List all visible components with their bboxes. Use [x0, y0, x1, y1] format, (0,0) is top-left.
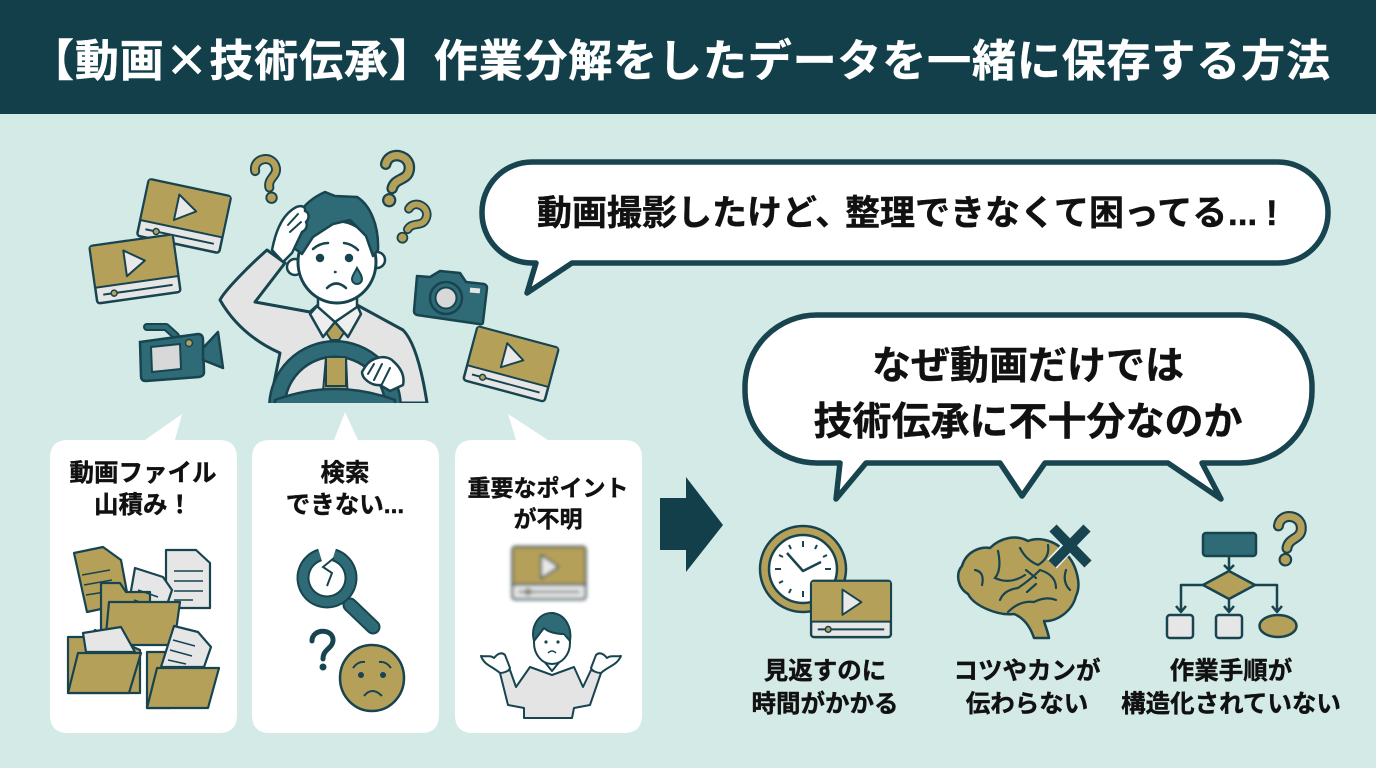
- card: video files piled up: [50, 414, 237, 733]
- icon: question mark: [1273, 515, 1303, 567]
- icon: broken magnifier: [303, 555, 373, 627]
- arrow: [660, 477, 723, 572]
- heading: できない...: [286, 492, 404, 519]
- speech bubble: top: 整理できなくて困ってる: [845, 194, 1227, 233]
- man figure: [218, 190, 428, 403]
- heading: 動画ファイル: [70, 459, 216, 487]
- speech bubble: why video alone is not enough: [745, 315, 1312, 499]
- reason: steps not structured: [1121, 515, 1341, 718]
- heading: 山積み！: [94, 491, 192, 519]
- speech bubble: top: ...: [1228, 194, 1257, 233]
- face features: [313, 243, 362, 288]
- label: 時間がかかる: [752, 689, 898, 718]
- icon: cross mark: [1052, 528, 1088, 564]
- label: 作業手順が: [1170, 656, 1292, 685]
- label: 見返すのに: [764, 657, 886, 685]
- icon: video player left: [89, 234, 181, 304]
- icon: video player top: [137, 179, 231, 253]
- shirt: [220, 250, 427, 403]
- neck and face: [287, 221, 385, 322]
- speech bubble: why video alone is not enough: 技術伝承に不十分なのか: [813, 401, 1243, 444]
- icon: video player right: [463, 326, 559, 402]
- card: cannot search: [252, 412, 439, 733]
- title banner: [0, 0, 1376, 114]
- speech bubble: top: [482, 162, 1328, 293]
- icon: question marks: [253, 153, 431, 247]
- icon: movie camera: [140, 327, 223, 381]
- icon: folders and documents: [68, 547, 219, 708]
- heading: が不明: [514, 506, 582, 532]
- hand on wheel: [362, 357, 404, 391]
- speech bubble: top: !: [1266, 194, 1278, 233]
- hair: [292, 192, 378, 256]
- hand on head: [272, 206, 309, 262]
- heading: 重要なポイント: [468, 475, 628, 501]
- icon: flowchart: [1167, 533, 1296, 638]
- label: 構造化されていない: [1121, 690, 1341, 718]
- label: コツやカンが: [954, 656, 1100, 685]
- tie: [322, 324, 348, 388]
- heading: 検索: [320, 459, 370, 487]
- icon: photo camera: [414, 271, 487, 324]
- reason: takes time to review: [752, 526, 898, 718]
- card: key points unclear: [455, 414, 642, 733]
- speech bubble: why video alone is not enough: なぜ動画だけでは: [872, 345, 1184, 388]
- reason: tacit knowledge not conveyed: [954, 528, 1100, 718]
- icon: sad face: [340, 645, 404, 711]
- steering wheel: [268, 340, 402, 403]
- speech bubble: top: 動画撮影したけど、: [537, 194, 850, 233]
- collar: [310, 305, 361, 337]
- icon: clock and video: [760, 526, 891, 637]
- icon: shrugging person: [481, 613, 621, 718]
- icon: question mark: [312, 631, 333, 670]
- icon: blurred video: [512, 547, 586, 599]
- title banner: 【動画×技術伝承】作業分解をしたデータを一緒に保存する方法: [30, 25, 1330, 89]
- label: 伝わらない: [966, 690, 1088, 718]
- icon: brain: [958, 537, 1078, 638]
- illustration: confused man with videos and cameras: [88, 150, 560, 403]
